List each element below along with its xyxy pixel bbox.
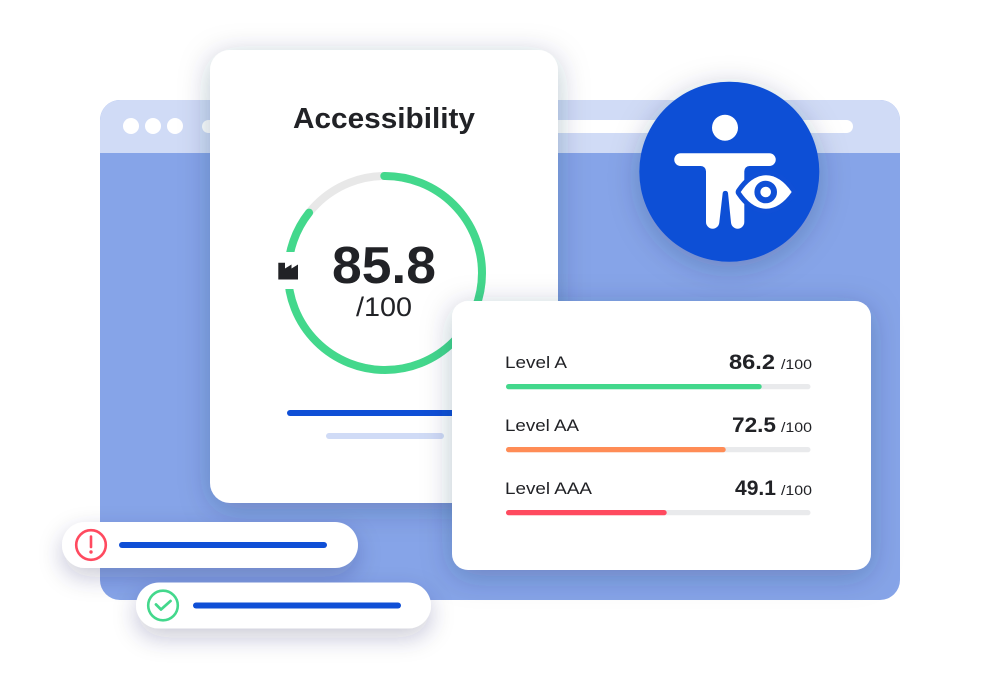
panel: WCAG levels — [452, 301, 871, 570]
icon: check — [148, 591, 178, 620]
row: Level AA: Level AA — [505, 416, 580, 435]
icon: factory — [278, 263, 298, 280]
icon: accessibility badge — [639, 82, 819, 262]
panel: accessibility score card — [210, 50, 558, 503]
alert pill: success — [136, 582, 431, 628]
address bar — [202, 120, 853, 133]
score maximum: /100 — [356, 292, 412, 322]
browser dots — [123, 118, 183, 134]
row: Level A — [505, 351, 812, 389]
placeholder line — [193, 602, 401, 608]
row: Level AAA: /100 — [781, 482, 812, 498]
row: Level AA: 72.5 — [732, 414, 776, 437]
row: Level A: Level A — [505, 353, 568, 372]
placeholder line: primary — [287, 410, 483, 416]
placeholder line: secondary — [326, 433, 444, 439]
row: Level AAA: 49.1 — [735, 477, 776, 500]
icon: warning — [76, 530, 106, 560]
row: Level AA — [505, 414, 812, 452]
row: Level A: /100 — [781, 356, 812, 372]
alert pill: error — [62, 522, 358, 568]
heading: Accessibility — [293, 103, 475, 135]
row: Level AAA: Level AAA — [505, 479, 593, 498]
placeholder line — [119, 542, 327, 548]
row: Level AAA — [505, 477, 812, 515]
row: Level A: 86.2 — [729, 351, 775, 374]
row: Level AA: /100 — [781, 419, 812, 435]
browser window — [100, 100, 900, 600]
score value: 85.8 — [332, 237, 436, 295]
score ring — [276, 176, 482, 370]
